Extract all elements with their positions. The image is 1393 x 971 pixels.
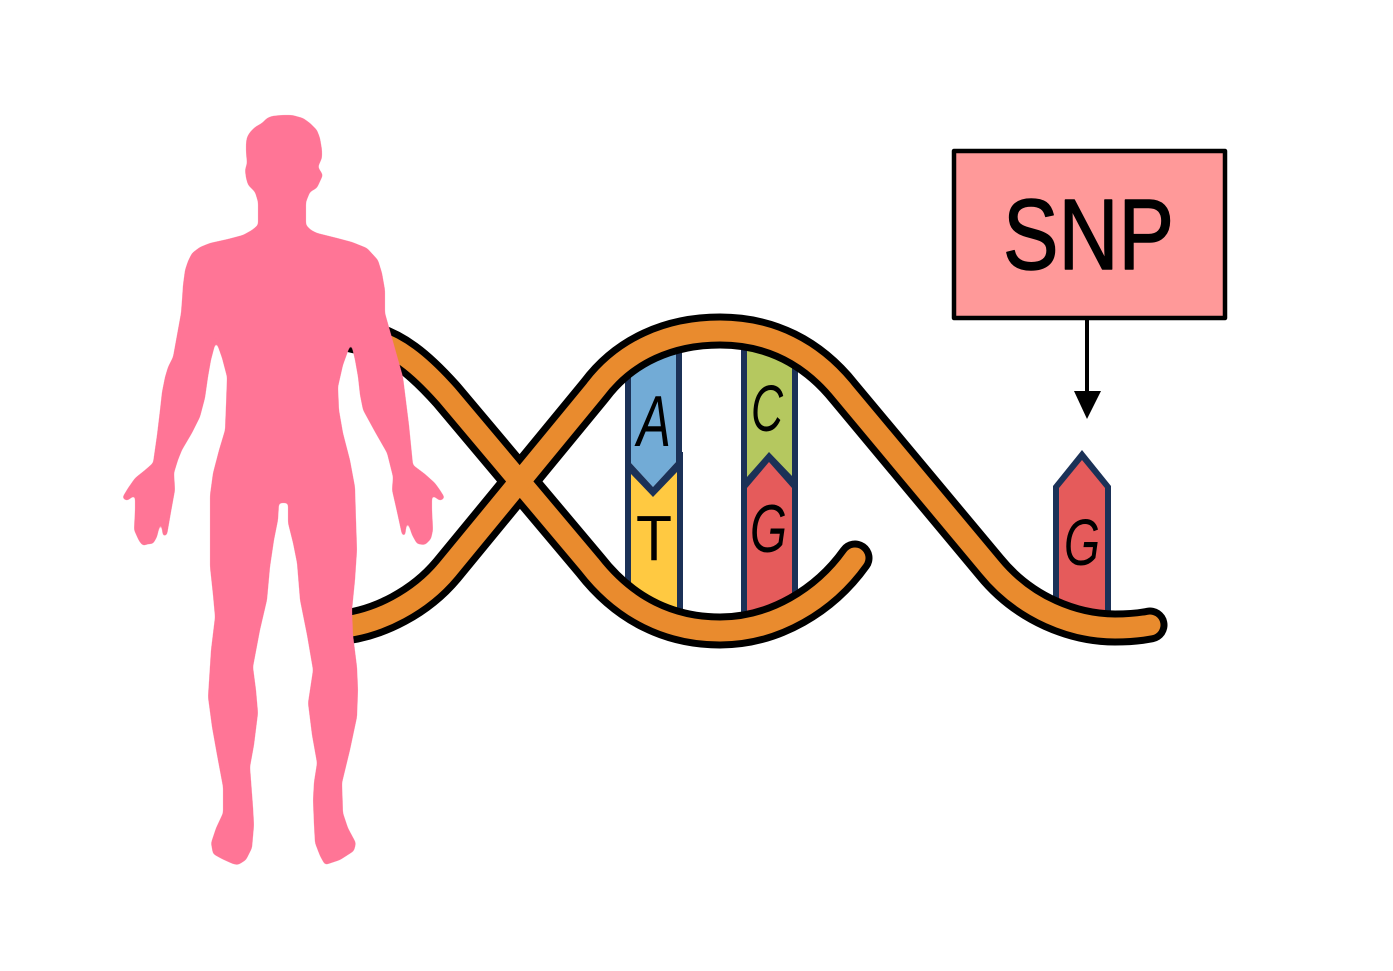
letter G single: G (1064, 505, 1100, 579)
human silhouette (122, 115, 445, 865)
letter A: A (634, 382, 671, 462)
base pair: A-T (625, 345, 683, 620)
arrow pointing to base G (1074, 319, 1101, 419)
letter T: T (636, 502, 672, 574)
SNP box (954, 151, 1225, 318)
SNP label: SNP (1003, 179, 1174, 291)
base pair: C-G (741, 340, 798, 620)
DNA strands (330, 330, 1150, 631)
unpaired base G (1053, 450, 1111, 620)
letter G: G (750, 491, 787, 567)
letter C: C (751, 371, 784, 445)
